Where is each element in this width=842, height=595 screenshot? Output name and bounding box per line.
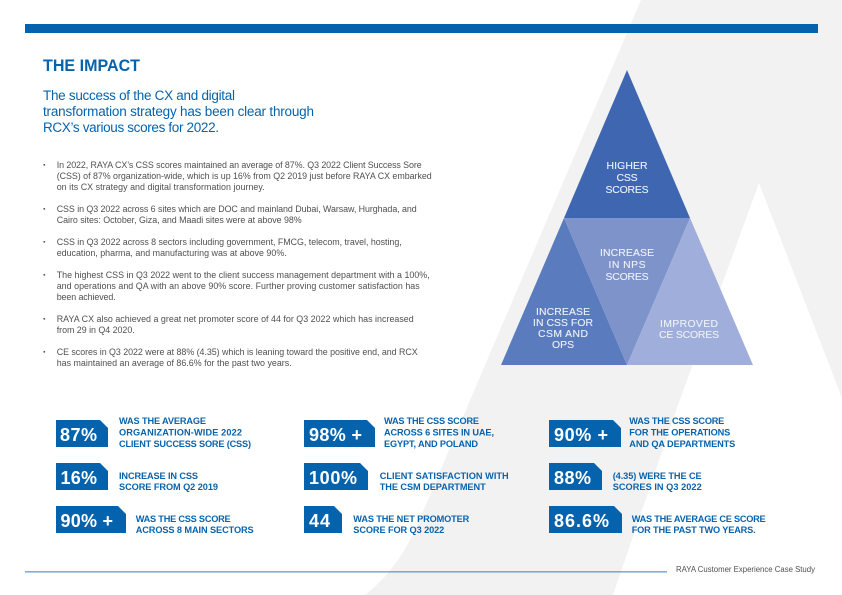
triangle: higher CSS scores: CSS <box>616 173 638 184</box>
stat: 90%+ sectors: WAS THE CSS SCORE <box>136 514 231 524</box>
stat: 88%: 88% <box>554 468 591 488</box>
stat: 90%+ departments: WAS THE CSS SCORE <box>629 416 724 426</box>
bullet: net promoter score: from 29 in Q4 2020. <box>57 325 135 335</box>
stat: 87%: CLIENT SUCCESS SORE (CSS) <box>119 439 251 449</box>
triangle: increase in CSS for CSM and OPS: IN CSS FOR <box>533 318 593 329</box>
triangle: increase in NPS scores: SCORES <box>606 272 649 283</box>
stat: 44: WAS THE NET PROMOTER <box>353 514 470 524</box>
stat: 100% <box>304 463 509 492</box>
subtitle <box>43 88 314 135</box>
bullet: six sites: Cairo sites: October, Giza, and Maadi sites were at above 98% <box>57 215 302 225</box>
triangle: improved CE scores <box>627 218 753 365</box>
bullet: six sites: CSS in Q3 2022 across 6 sites which are DOC and mainland Dubai, Warsaw, Hurghada, and <box>57 204 417 214</box>
stat: 44: 44 <box>309 511 330 531</box>
stat: 90%+ sectors <box>56 506 254 535</box>
bullet: CE scores: has maintained an average of 86.6% for the past two years. <box>57 358 292 368</box>
bullet: eight sectors <box>44 237 402 258</box>
bullet: highest CSS: and operations and QA with an above 90% score. Further proving customer satisfaction has <box>57 281 420 291</box>
stat: 100%: THE CSM DEPARTMENT <box>380 482 486 492</box>
footer: RAYA Customer Experience Case Study <box>676 565 815 574</box>
bullet: net promoter score: RAYA CX also achieved a great net promoter score of 44 for Q3 2022 which has increased <box>57 314 414 324</box>
stat: 100%: CLIENT SATISFACTION WITH <box>380 471 509 481</box>
pyramid diagram <box>501 70 753 365</box>
stat: 44: SCORE FOR Q3 2022 <box>353 525 444 535</box>
bullet: six sites <box>44 204 417 225</box>
bullet: net promoter score <box>44 314 414 335</box>
stat: 90%+ departments: 90% + <box>554 425 608 445</box>
bullet: eight sectors: education, pharma, and manufacturing was at above 90%. <box>57 248 287 258</box>
stat: 16% <box>56 463 218 492</box>
bullet: CE scores <box>44 347 418 368</box>
stat: 98%+: ACROSS 6 SITES IN UAE, <box>384 428 494 438</box>
stat: 98%+: WAS THE CSS SCORE <box>384 416 479 426</box>
triangle: increase in NPS scores: IN NPS <box>608 260 646 271</box>
subtitle: The success of the CX and digital <box>43 88 235 103</box>
stat: 90%+ sectors: ACROSS 8 MAIN SECTORS <box>136 525 254 535</box>
subtitle: transformation strategy has been clear through <box>43 104 314 119</box>
bullet: highest CSS: been achieved. <box>57 292 116 302</box>
stat: 44 <box>304 506 470 535</box>
bullet: highest CSS <box>44 270 430 302</box>
stat: 98%+: EGYPT, AND POLAND <box>384 439 478 449</box>
stat: 88% <box>549 463 702 492</box>
bullet: CSS average: (CSS) of 87% organization-wide, which is up 16% from Q2 2019 just before RAYA CX embarked <box>57 171 432 181</box>
stat: 87%: ORGANIZATION-WIDE 2022 <box>119 428 242 438</box>
stat: 98%+ <box>304 416 494 449</box>
stat: 88%: SCORES IN Q3 2022 <box>613 482 702 492</box>
stat: 86.6%: FOR THE PAST TWO YEARS. <box>632 525 756 535</box>
stat: 90%+ sectors: 90% + <box>60 511 113 531</box>
stat: 16%: 16% <box>60 468 97 488</box>
stat: 90%+ departments <box>549 416 735 449</box>
stat: 90%+ departments: FOR THE OPERATIONS <box>629 428 730 438</box>
bullet: highest CSS: The highest CSS in Q3 2022 went to the client success management department with a 100%, <box>57 270 430 280</box>
stat: 100%: 100% <box>309 468 357 488</box>
stat: 16%: SCORE FROM Q2 2019 <box>119 482 218 492</box>
stat: 87%: 87% <box>60 425 97 445</box>
triangle: increase in NPS scores <box>564 218 690 365</box>
triangle: increase in CSS for CSM and OPS <box>501 218 627 365</box>
stat: 86.6%: 86.6% <box>554 511 609 531</box>
triangle: increase in NPS scores: INCREASE <box>600 248 654 259</box>
stat: 90%+ departments: AND QA DEPARTMENTS <box>629 439 735 449</box>
triangle: increase in CSS for CSM and OPS: OPS <box>552 340 574 351</box>
title: THE IMPACT <box>43 57 140 75</box>
bullet: CSS average: on its CX strategy and digital transformation journey. <box>57 182 265 192</box>
triangle: increase in CSS for CSM and OPS: INCREASE <box>536 307 590 318</box>
stat: 86.6% <box>549 506 766 535</box>
triangle: increase in CSS for CSM and OPS: CSM AND <box>538 329 588 340</box>
triangle: improved CE scores: CE SCORES <box>659 330 719 341</box>
stat: 87% <box>56 416 251 449</box>
triangle: higher CSS scores: HIGHER <box>606 161 648 172</box>
triangle: higher CSS scores: SCORES <box>606 185 649 196</box>
stat: 86.6%: WAS THE AVERAGE CE SCORE <box>632 514 766 524</box>
bullet: CE scores: CE scores in Q3 2022 were at 88% (4.35) which is leaning toward the positive end, and RCX <box>57 347 418 357</box>
stat: 87%: WAS THE AVERAGE <box>119 416 206 426</box>
bullet: CSS average: In 2022, RAYA CX’s CSS scores maintained an average of 87%. Q3 2022 Client Success Sore <box>57 160 422 170</box>
subtitle: RCX’s various scores for 2022. <box>43 120 219 135</box>
stat: 98%+: 98% + <box>309 425 362 445</box>
bullet: eight sectors: CSS in Q3 2022 across 8 sectors including government, FMCG, telecom, travel, hosting, <box>57 237 402 247</box>
stat: 16%: INCREASE IN CSS <box>119 471 198 481</box>
triangle: higher CSS scores <box>564 70 690 218</box>
triangle: improved CE scores: IMPROVED <box>660 319 718 330</box>
stat: 88%: (4.35) WERE THE CE <box>613 471 702 481</box>
bullet list <box>44 160 432 368</box>
bullet: CSS average <box>44 160 432 192</box>
